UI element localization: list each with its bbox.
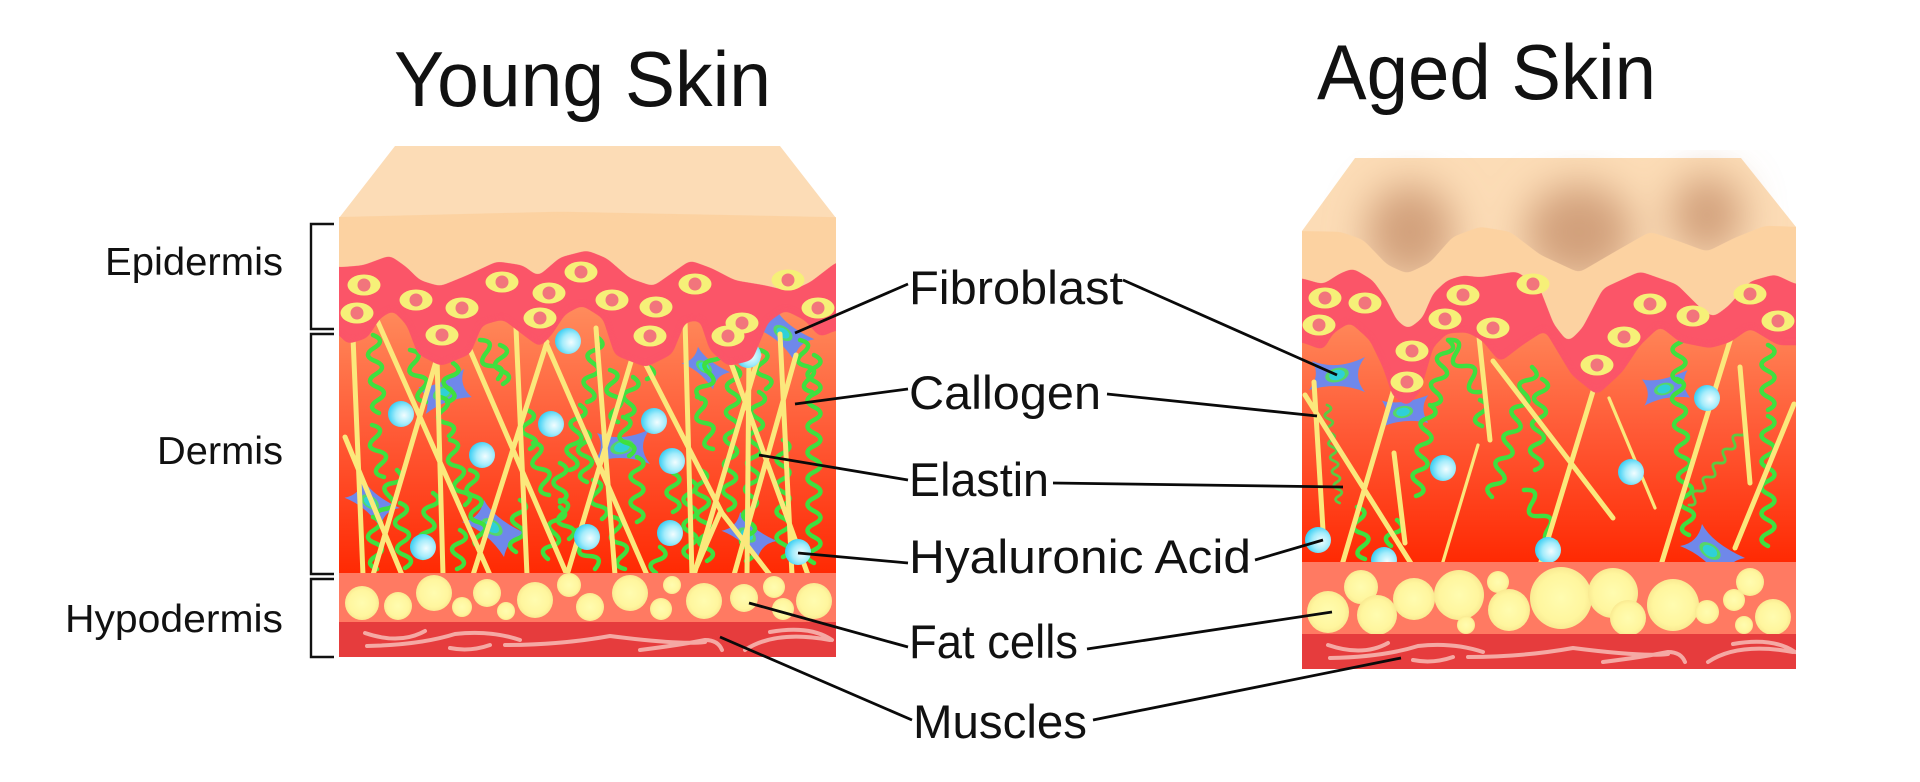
bracket: epidermis [311,224,334,329]
epidermis front [310,212,860,291]
epidermis front with wrinkle folds [1302,226,1796,340]
tight damaged elastin [1325,405,1745,505]
title: Aged Skin: Aged Skin [1317,28,1656,116]
elastin fibres [1353,330,1774,559]
muscle strands [1328,642,1795,662]
fibroblasts in dermis [1309,351,1745,581]
label: Callogen: Callogen [909,366,1101,419]
panel: aged skin cross-section [1275,158,1820,669]
epidermal cells [340,262,834,346]
title: Young Skin: Young Skin [394,35,771,123]
label: Muscles: Muscles [913,695,1087,748]
basal red layer [339,251,836,366]
fat cells [1307,567,1791,636]
fibroblasts in dermis [344,309,814,560]
hyaluronic acid spheres [1305,385,1720,573]
fat cells [345,573,832,621]
muscle layer [1302,634,1796,669]
label: Hyaluronic Acid: Hyaluronic Acid [909,530,1251,583]
dermis background [1302,300,1796,562]
skin top surface [339,146,836,218]
hypodermis layer [1302,562,1796,634]
label: Epidermis: Epidermis [105,241,283,284]
dermis background [339,295,836,573]
hypodermis layer [339,573,836,622]
thin collagen fibres [1442,398,1655,565]
label: Hypodermis: Hypodermis [65,598,283,641]
label: Dermis: Dermis [157,430,283,473]
collagen fibres [345,320,808,575]
wrinkle shading [1366,175,1743,280]
hyaluronic acid spheres [388,328,811,565]
muscle strands [365,630,832,650]
label: Fat cells: Fat cells [909,615,1078,668]
label: Elastin: Elastin [909,453,1049,506]
basal red layer [1302,270,1796,404]
collagen fibres [1305,328,1794,565]
epidermal cells [1302,274,1794,392]
bracket: hypodermis [311,579,334,657]
label: Fibroblast: Fibroblast [909,261,1123,314]
elastin fibres [368,335,820,573]
skin top surface [1302,158,1796,272]
leader lines connecting labels to both skin panels [720,280,1401,720]
panel: young skin cross-section [310,146,860,657]
muscle layer [339,622,836,657]
bracket: dermis [311,334,334,574]
